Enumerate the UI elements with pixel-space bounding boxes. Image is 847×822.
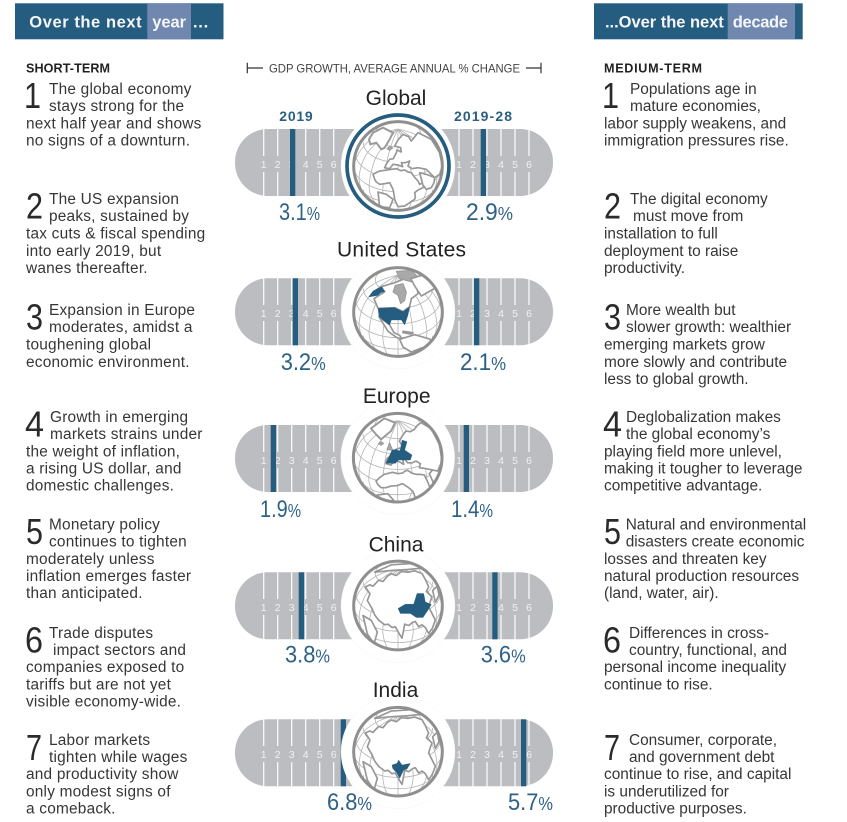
heading: india: India <box>373 679 419 702</box>
short-term item 6: impact sectors and <box>53 642 186 659</box>
value: 5.7 percent: 5.7% <box>508 789 553 816</box>
short-term item 6: visible economy-wide. <box>26 694 181 711</box>
medium-term item 5: losses and threaten key <box>604 551 767 568</box>
header: over the next year: Over the next <box>29 14 142 32</box>
medium-term item 5: natural production resources <box>604 568 799 585</box>
medium-term item 2: installation to full <box>604 226 718 242</box>
gauge: india: 123456 <box>261 749 337 761</box>
short-term item 2: tax cuts & fiscal spending <box>26 226 205 242</box>
globe: china <box>341 549 455 662</box>
short-term item 2: 2 <box>26 186 43 226</box>
short-term item 4 <box>25 404 203 494</box>
label: 2019: 2019 <box>279 108 313 124</box>
value: 2.9 percent: 2.9% <box>466 199 513 226</box>
medium-term item 4: 4 <box>603 404 622 444</box>
medium-term item 5: (land, water, air). <box>604 585 719 602</box>
medium-term item 7: productive purposes. <box>604 800 747 818</box>
medium-term item 6: 6 <box>603 620 621 660</box>
short-term item 6: 6 <box>25 620 43 660</box>
medium-term item 3: 3 <box>604 296 621 338</box>
medium-term item 4: Deglobalization makes <box>626 409 781 426</box>
medium-term item 6: Differences in cross- <box>629 625 769 642</box>
medium-term item 3: emerging markets grow <box>604 336 766 354</box>
value: 3.8 percent: 3.8% <box>285 642 330 669</box>
medium-term item 3: more slowly and contribute <box>604 354 787 371</box>
panel: global <box>235 87 553 226</box>
medium-term item 2: 2 <box>604 186 621 226</box>
panel: china <box>235 534 553 669</box>
short-term item 3 <box>26 296 195 371</box>
medium-term item 2 <box>604 186 768 277</box>
medium-term item 1: labor supply weakens, and <box>604 115 786 132</box>
short-term item 3: toughening global <box>26 336 151 354</box>
gauge: india <box>235 718 553 787</box>
medium-term item 1: 1 <box>602 75 619 116</box>
medium-term item 6: continue to rise. <box>604 677 713 694</box>
short-term item 4: domestic challenges. <box>26 478 174 494</box>
medium-term item 1: Populations age in <box>630 81 757 98</box>
medium-term item 4: competitive advantage. <box>604 478 762 494</box>
globe: india <box>341 695 455 809</box>
medium-term item 6 <box>603 620 787 694</box>
header: over the next year: year <box>152 14 187 32</box>
medium-term item 1: mature economies, <box>630 98 761 115</box>
medium-term item 7: Consumer, corporate, <box>629 732 777 749</box>
value: 6.8 percent: 6.8% <box>327 789 372 816</box>
short-term item 6: companies exposed to <box>26 659 184 676</box>
gauge: india: 123456 <box>456 749 532 761</box>
label: 2019-28: 2019-28 <box>454 108 512 124</box>
medium-term item 7: and government debt <box>629 749 775 766</box>
short-term item 7: Labor markets <box>49 732 150 749</box>
short-term item 1: 1 <box>24 75 41 116</box>
panel: europe <box>235 385 553 523</box>
gauge: europe: 123456 <box>261 455 337 467</box>
value: 3.2 percent: 3.2% <box>281 349 326 376</box>
medium-term item 1 <box>602 75 789 150</box>
short-term item 6 <box>25 620 186 711</box>
medium-term item 5: Natural and environmental <box>626 516 806 533</box>
short-term item 1 <box>24 75 202 150</box>
short-term item 4: the weight of inflation, <box>26 444 180 460</box>
short-term item 7: 7 <box>26 727 42 768</box>
short-term item 2: wanes thereafter. <box>25 260 148 277</box>
gauge: united states: 123456 <box>261 308 337 320</box>
medium-term item 7: 7 <box>604 727 620 768</box>
short-term item 4: a rising US dollar, and <box>26 460 182 478</box>
short-term item 4: markets strains under <box>50 426 203 443</box>
heading: global: Global <box>366 87 426 110</box>
heading: china: China <box>369 534 424 557</box>
short-term item 3: Expansion in Europe <box>49 302 195 319</box>
medium-term item 6: country, functional, and <box>629 642 787 659</box>
medium-term item 7 <box>604 727 791 818</box>
short-term item 2: The US expansion <box>49 191 179 208</box>
heading: europe: Europe <box>363 385 431 408</box>
short-term item 1: next half year and shows <box>26 115 202 132</box>
short-term item 4: Growth in emerging <box>50 409 188 426</box>
axis label: GDP growth: GDP GROWTH, AVERAGE ANNUAL % CHANGE <box>269 62 520 76</box>
short-term item 5: moderately unless <box>26 551 155 568</box>
gauge: china: 123456 <box>261 602 337 614</box>
medium-term item 3 <box>604 296 791 388</box>
gauge: europe <box>235 424 553 493</box>
medium-term item 7: is underutilized for <box>604 784 729 801</box>
short-term item 7: only modest signs of <box>26 784 171 801</box>
short-term item 5: Monetary policy <box>49 516 160 533</box>
short-term item 3: economic environment. <box>26 354 190 371</box>
gauge: china <box>235 571 553 640</box>
short-term item 1: stays strong for the <box>49 98 184 115</box>
medium-term item 3: less to global growth. <box>604 371 749 388</box>
gauge: europe: 123456 <box>456 455 532 467</box>
globe: united states <box>341 255 455 369</box>
short-term item 5: 5 <box>26 511 43 552</box>
panel: united states <box>235 239 553 376</box>
medium-term item 2: must move from <box>633 208 743 225</box>
medium-term item 2: The digital economy <box>630 191 768 208</box>
short-term item 7: and productivity show <box>26 766 179 783</box>
medium-term item 5: disasters create economic <box>626 534 805 550</box>
value: 1.9 percent: 1.9% <box>260 496 301 523</box>
short-term item 7 <box>26 727 188 818</box>
short-term item 2: into early 2019, but <box>26 243 162 260</box>
short-term item 1: The global economy <box>49 81 192 98</box>
short-term item 4: 4 <box>25 404 44 444</box>
medium-term item 5: 5 <box>604 511 621 552</box>
medium-term item 2: deployment to raise <box>604 243 738 260</box>
medium-term item 4: making it tougher to leverage <box>604 460 802 478</box>
globe: global <box>341 109 455 223</box>
medium-term item 3: More wealth but <box>626 302 736 319</box>
short-term item 6: tariffs but are not yet <box>26 677 172 694</box>
header: over the next year <box>15 3 224 39</box>
header: over the next year: ... <box>193 14 209 32</box>
panel: india <box>235 679 553 816</box>
gauge: united states: 123456 <box>456 308 532 320</box>
medium-term item 5 <box>604 511 806 602</box>
header: over the next decade: ...Over the next <box>605 14 724 32</box>
short-term item 7: tighten while wages <box>49 749 188 766</box>
short-term item 2: peaks, sustained by <box>49 208 189 225</box>
gauge: china: 123456 <box>456 602 532 614</box>
heading: united states: United States <box>337 239 466 262</box>
short-term item 6: Trade disputes <box>49 625 153 642</box>
gauge: united states <box>235 277 553 346</box>
short-term item 7: a comeback. <box>26 800 116 818</box>
short-term item 5 <box>26 511 191 602</box>
medium-term item 6: personal income inequality <box>604 659 787 676</box>
value: 2.1 percent: 2.1% <box>460 349 506 376</box>
value: 3.1 percent: 3.1% <box>279 199 320 226</box>
short-term item 1: no signs of a downturn. <box>26 133 190 150</box>
value: 1.4 percent: 1.4% <box>451 496 493 523</box>
medium-term item 4 <box>603 404 802 494</box>
short-term item 5: inflation emerges faster <box>26 568 191 585</box>
short-term item 5: than anticipated. <box>26 585 143 602</box>
value: 3.6 percent: 3.6% <box>481 642 526 669</box>
gauge: global: 123456 <box>456 159 532 171</box>
medium-term item 7: continue to rise, and capital <box>604 766 791 783</box>
gauge: global <box>235 128 553 197</box>
short-term item 3: 3 <box>26 296 43 338</box>
heading: medium-term: MEDIUM-TERM <box>604 61 702 75</box>
medium-term item 3: slower growth: wealthier <box>626 319 791 336</box>
heading: short-term: SHORT-TERM <box>26 61 110 75</box>
header: over the next decade <box>594 3 803 39</box>
header: over the next decade: decade <box>733 14 789 32</box>
medium-term item 4: the global economy’s <box>626 426 771 443</box>
gauge: global: 123456 <box>261 159 337 171</box>
short-term item 5: continues to tighten <box>49 534 187 550</box>
globe: europe <box>341 401 455 515</box>
short-term item 3: moderates, amidst a <box>49 319 193 336</box>
short-term item 2 <box>25 186 205 277</box>
medium-term item 4: playing field more unlevel, <box>604 444 782 460</box>
medium-term item 2: productivity. <box>604 260 685 277</box>
medium-term item 1: immigration pressures rise. <box>604 133 789 150</box>
